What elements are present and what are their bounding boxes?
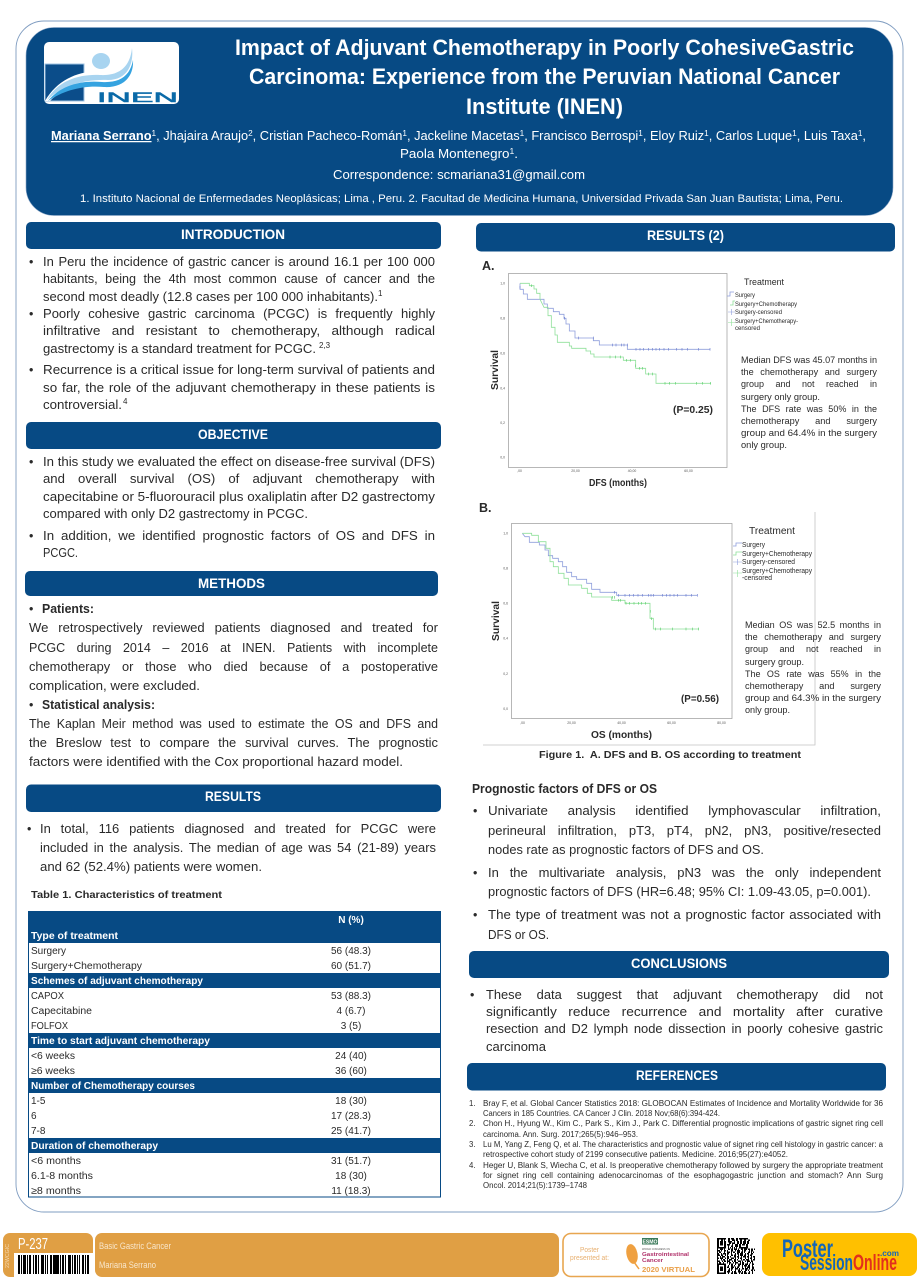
bullet: study aim: • bbox=[29, 455, 33, 469]
bullet: conclusion: carcinoma bbox=[486, 1040, 546, 1054]
session info bar: Mariana Serrano bbox=[99, 1260, 156, 1270]
note: DFS medians: chemotherapy and surgery bbox=[741, 416, 878, 426]
chart B: OS survival curves: 40,00 bbox=[617, 721, 626, 725]
table: characteristics of treatment: 56 (48.3) bbox=[331, 946, 371, 957]
table: characteristics of treatment: Time to start adjuvant chemotherapy bbox=[31, 1036, 210, 1047]
table: characteristics of treatment: Number of Chemotherapy courses bbox=[31, 1081, 195, 1092]
chart B: OS survival curves: 0,6 bbox=[503, 602, 508, 606]
table: characteristics of treatment: CAPOX bbox=[31, 991, 64, 1002]
note: DFS medians: only group. bbox=[741, 440, 787, 450]
affiliations: 1. Instituto Nacional de Enfermedades Neoplásicas; Lima , Peru. 2. Facultad de Medicina Humana, Universidad Privada San Juan Bautista; Lima, Peru. bbox=[80, 193, 843, 205]
bullet: multivariate analysis: In the multivariate analysis, pN3 was the only independent bbox=[488, 866, 882, 880]
bullet: univariate analysis: • bbox=[473, 804, 477, 818]
note: OS medians: group and 64.3% in the surgery bbox=[745, 693, 882, 703]
legend B bbox=[733, 526, 812, 582]
bullet: study aim: In this study we evaluated the effect on disease-free survival (DFS) bbox=[43, 455, 435, 469]
congress name: Gastrointestinal bbox=[642, 1252, 690, 1258]
legend A bbox=[727, 277, 798, 332]
heading: INTRODUCTION bbox=[26, 222, 441, 249]
table: characteristics of treatment: 60 (51.7) bbox=[331, 961, 371, 972]
chart A: DFS survival curves bbox=[490, 274, 727, 489]
chart B: OS survival curves: 0,8 bbox=[503, 566, 508, 570]
chart B: OS survival curves: (P=0.56) bbox=[681, 694, 719, 705]
panel: methods bbox=[25, 571, 438, 769]
authors: 1 bbox=[638, 129, 643, 138]
legend B: Surgery-censored bbox=[742, 559, 795, 566]
heading: OBJECTIVE: OBJECTIVE bbox=[198, 427, 268, 442]
bullet: recurrence: 4 bbox=[123, 397, 128, 406]
heading: METHODS bbox=[25, 571, 438, 596]
reference list: Bray F, et al. Global Cancer Statistics 2018: GLOBOCAN Estimates of Incidence and Mortality Worldwide for 36 bbox=[483, 1099, 883, 1108]
logo: INEN bbox=[44, 42, 179, 105]
chart A: DFS survival curves: 0,4 bbox=[500, 386, 505, 390]
reference list: carcinoma. Ann. Surg. 2017;265(5):946–953. bbox=[483, 1130, 638, 1139]
table: characteristics of treatment: FOLFOX bbox=[31, 1021, 68, 1032]
bullet: cohort summary: • bbox=[27, 822, 31, 836]
footer bbox=[3, 1233, 917, 1277]
icon: wheat bbox=[625, 1243, 639, 1269]
bullet: incidence: second most deadly (12.8 cases per 100 000 inhabitants). bbox=[43, 290, 378, 304]
heading: OBJECTIVE bbox=[26, 422, 441, 449]
bullet: PCGC: • bbox=[29, 307, 33, 321]
panel: results bbox=[26, 784, 441, 1197]
authors: , bbox=[862, 129, 866, 143]
authors: 1 bbox=[152, 129, 157, 138]
legend A: Surgery+Chemotherapy bbox=[735, 301, 798, 308]
subsection: statistical analysis: factors were identified with the Cox proportional hazard model. bbox=[29, 755, 403, 769]
label B: B. bbox=[479, 501, 492, 515]
panel: prognostic factors bbox=[472, 782, 882, 942]
table: characteristics of treatment: Surgery+Chemotherapy bbox=[31, 961, 142, 972]
table: characteristics of treatment: 25 (41.7) bbox=[331, 1126, 371, 1137]
table: characteristics of treatment: 6.1-8 months bbox=[31, 1171, 93, 1182]
bullet: incidence: • bbox=[29, 255, 33, 269]
note: OS medians: surgery group. bbox=[745, 657, 804, 667]
authors: Jhajaira Araujo bbox=[163, 129, 246, 143]
bullet: cohort summary bbox=[27, 822, 436, 874]
table: characteristics of treatment: 36 (60) bbox=[335, 1066, 367, 1077]
legend A: censored bbox=[735, 325, 760, 332]
authors: , Francisco Berrospi bbox=[524, 129, 638, 143]
logo: ESMO: ESMO bbox=[642, 1240, 658, 1246]
session info bar: Basic Gastric Cancer bbox=[99, 1241, 171, 1251]
authors: , Carlos Luque bbox=[709, 129, 792, 143]
table: characteristics of treatment bbox=[28, 911, 441, 1197]
reference list: 3. bbox=[469, 1140, 476, 1149]
subsection: patients: Patients: bbox=[42, 602, 94, 616]
table: characteristics of treatment: 31 (51.7) bbox=[331, 1156, 371, 1167]
reference list: retrospective cohort study of 2199 consecutive patients. Medicine. 2016;95(27):e4052. bbox=[483, 1150, 788, 1159]
bullet: type of treatment: The type of treatment was not a prognostic factor associated with bbox=[488, 908, 881, 922]
authors: , bbox=[156, 129, 160, 143]
title: Carcinoma: Experience from the Peruvian National Cancer bbox=[249, 64, 840, 89]
note: OS medians: chemotherapy and surgery bbox=[745, 681, 882, 691]
chart A: DFS survival curves: (P=0.25) bbox=[673, 405, 713, 416]
bullet: conclusion: resection and D2 lymph node dissection in poorly cohesive gastric bbox=[486, 1022, 883, 1036]
subsection: statistical analysis: the Breslow test to compare the survival curves. The prognostic bbox=[29, 736, 438, 750]
chart A: DFS survival curves: 60,00 bbox=[684, 469, 693, 473]
bullet: conclusion: These data suggest that adjuvant chemotherapy did not bbox=[486, 988, 884, 1002]
chart B: OS survival curves bbox=[483, 512, 815, 745]
reference list: Cancers in 185 Countries. CA Cancer J Clin. 2018 Nov;68(6):394-424. bbox=[483, 1109, 720, 1118]
authors: , Luis Taxa bbox=[797, 129, 858, 143]
authors: 1 bbox=[792, 129, 797, 138]
header banner bbox=[26, 28, 893, 216]
congress badge bbox=[563, 1234, 709, 1276]
legend A: Surgery bbox=[735, 292, 756, 299]
QR code bbox=[717, 1239, 755, 1273]
chart A: DFS survival curves: 0,0 bbox=[500, 456, 505, 460]
poster ID badge: 22WCGIC bbox=[5, 1244, 11, 1268]
note: DFS medians: surgery only group. bbox=[741, 392, 820, 402]
subsection: patients: • bbox=[29, 602, 33, 616]
legend A: Surgery+Chemotherapy- bbox=[735, 318, 798, 325]
chart A: DFS survival curves: 20,00 bbox=[571, 469, 580, 473]
subsection: patients: complication, were excluded. bbox=[29, 679, 200, 693]
bullet: univariate analysis: Univariate analysis identified lymphovascular infiltration, bbox=[488, 804, 881, 818]
bullet: PCGC: infiltrative and resistant to chemotherapy, although radical bbox=[43, 324, 435, 338]
panel: results 2 bbox=[476, 223, 895, 761]
reference list: Chon H., Hyung W., Kim C., Park S., Kim J., Park C. Differential prognostic implications of gastric signet ring cell bbox=[483, 1119, 883, 1128]
authors: 1 bbox=[402, 129, 408, 138]
chart B: OS survival curves: 1,0 bbox=[503, 532, 508, 536]
panel: introduction bbox=[26, 222, 441, 412]
bullet: PCGC bbox=[29, 307, 436, 356]
bullet: prognostic factors: • bbox=[29, 529, 33, 543]
bullet: PCGC: gastrectomy is a standard treatment for PCGC. bbox=[43, 342, 316, 356]
congress name: Cancer bbox=[642, 1258, 664, 1264]
reference list: 2. bbox=[469, 1119, 476, 1128]
chart B: OS survival curves: 60,00 bbox=[667, 721, 676, 725]
legend B: Surgery+Chemotherapy bbox=[742, 568, 812, 575]
poster ID badge: P-237 bbox=[18, 1236, 48, 1253]
bullet: PCGC: Poorly cohesive gastric carcinoma (PCGC) is frequently highly bbox=[43, 307, 436, 321]
chart A: DFS survival curves: DFS (months) bbox=[589, 478, 647, 489]
heading: RESULTS bbox=[26, 784, 441, 812]
subsection: patients: chemotherapy or those who died because of a postoperative bbox=[29, 660, 438, 674]
table: characteristics of treatment: Duration of chemotherapy bbox=[31, 1141, 158, 1152]
title: Institute (INEN) bbox=[466, 94, 623, 119]
authors: 1 bbox=[704, 129, 709, 138]
figure caption: Figure 1. A. DFS and B. OS according to treatment bbox=[539, 749, 802, 761]
reference list bbox=[469, 1099, 884, 1190]
poster ID badge bbox=[3, 1233, 93, 1277]
table: characteristics of treatment: ≥8 months bbox=[31, 1186, 81, 1197]
bullet: recurrence: so far, the role of the adjuvant chemotherapy in these patients is bbox=[43, 381, 435, 395]
note: OS medians: the chemotherapy and surgery bbox=[745, 632, 882, 642]
subsection: statistical analysis: The Kaplan Meir method was used to estimate the OS and DFS and bbox=[29, 717, 438, 731]
chart B: OS survival curves: 80,00 bbox=[717, 721, 726, 725]
authors: Paola Montenegro bbox=[400, 147, 502, 161]
note: OS medians bbox=[745, 620, 882, 715]
note: OS medians: only group. bbox=[745, 705, 790, 715]
bullet: prognostic factors bbox=[29, 529, 435, 560]
bullet: incidence bbox=[29, 255, 435, 304]
congress name: 2020 VIRTUAL bbox=[642, 1267, 696, 1274]
reference list: Oncol. 2014;21(5):1739–1748 bbox=[483, 1181, 587, 1190]
subsection: statistical analysis bbox=[29, 698, 438, 769]
subsection: statistical analysis: Statistical analysis: bbox=[42, 698, 155, 712]
table: characteristics of treatment: 11 (18.3) bbox=[331, 1186, 371, 1197]
chart B: OS survival curves: 20,00 bbox=[567, 721, 576, 725]
panel: conclusions bbox=[469, 951, 889, 1054]
bullet: univariate analysis: perineural infiltration, pT3, pT4, pN2, pN3, positive/resected bbox=[488, 824, 881, 838]
note: DFS medians: the chemotherapy and surgery bbox=[741, 367, 878, 377]
legend B: Surgery bbox=[742, 542, 765, 549]
title: Impact of Adjuvant Chemotherapy in Poorly CohesiveGastric bbox=[235, 35, 854, 60]
authors: , Jackeline Macetas bbox=[407, 129, 520, 143]
reference list: for signet ring cell containing adenocarcinomas of the esophagogastric junction and stomach? Ann Surg bbox=[483, 1171, 883, 1180]
heading: INTRODUCTION: INTRODUCTION bbox=[181, 227, 285, 242]
congress badge: presented at: bbox=[570, 1255, 609, 1262]
congress badge: Poster bbox=[580, 1247, 600, 1254]
subsection: statistical analysis: • bbox=[29, 698, 33, 712]
bullet: incidence: In Peru the incidence of gastric cancer is around 16.1 per 100 000 bbox=[43, 255, 435, 269]
heading: REFERENCES: REFERENCES bbox=[636, 1068, 718, 1083]
bullet: multivariate analysis: prognostic factors of DFS (HR=6.48; 95% CI: 1.09-43.05, p=0.001). bbox=[488, 885, 871, 899]
logo: PosterSessionOnline: Poster bbox=[782, 1235, 833, 1263]
chart A: DFS survival curves: 40,00 bbox=[628, 469, 636, 473]
table: characteristics of treatment: Surgery bbox=[31, 946, 66, 957]
subsection: patients bbox=[29, 602, 438, 693]
chart A: DFS survival curves: 0,2 bbox=[500, 421, 505, 425]
bullet: prognostic factors: In addition, we identified prognostic factors of OS and DFS in bbox=[43, 529, 435, 543]
table: characteristics of treatment: Schemes of adjuvant chemotherapy bbox=[31, 976, 203, 987]
table: characteristics of treatment: Type of treatment bbox=[31, 931, 119, 942]
subheading: prognostic factors: Prognostic factors of DFS or OS bbox=[472, 782, 657, 796]
legend B: Treatment bbox=[749, 526, 795, 537]
heading: METHODS: METHODS bbox=[198, 576, 265, 591]
table: characteristics of treatment: <6 weeks bbox=[31, 1051, 75, 1062]
heading: RESULTS: RESULTS bbox=[205, 789, 261, 804]
bullet: prognostic factors: PCGC. bbox=[43, 546, 78, 560]
chart A: DFS survival curves: ,00 bbox=[517, 469, 522, 473]
bullet: recurrence bbox=[29, 363, 435, 412]
subsection: patients: We retrospectively reviewed patients diagnosed and treated for bbox=[29, 621, 438, 635]
bullet: recurrence: controversial. bbox=[43, 398, 122, 412]
bullet: conclusion: significantly reduce recurrence and mortality after curative bbox=[486, 1005, 883, 1019]
table: characteristics of treatment: 4 (6.7) bbox=[337, 1006, 365, 1017]
reference list: 4. bbox=[469, 1161, 476, 1170]
bullet: cohort summary: included in the analysis. The median of age was 54 (21-89) years bbox=[40, 841, 436, 855]
table: characteristics of treatment: 6 bbox=[31, 1111, 37, 1122]
bullet: PCGC: 2,3 bbox=[319, 341, 331, 350]
reference list: Heger U, Blank S, Wiecha C, et al. Is preoperative chemotherapy followed by surgery the appropriate treatment bbox=[483, 1161, 884, 1170]
authors: 1 bbox=[520, 129, 525, 138]
panel: objective bbox=[26, 422, 441, 560]
authors: 1 bbox=[509, 147, 515, 156]
legend A: Surgery-censored bbox=[735, 309, 782, 316]
bullet: cohort summary: In total, 116 patients diagnosed and treated for PCGC were bbox=[40, 822, 436, 836]
authors bbox=[51, 129, 866, 161]
note: OS medians: The OS rate was 55% in the bbox=[745, 669, 881, 679]
table: characteristics of treatment: Capecitabine bbox=[31, 1006, 92, 1017]
bullet: univariate analysis: nodes rate as prognostic factors of DFS and OS. bbox=[488, 843, 764, 857]
table: characteristics of treatment: 17 (28.3) bbox=[331, 1111, 371, 1122]
table: characteristics of treatment: ≥6 weeks bbox=[31, 1066, 75, 1077]
table: characteristics of treatment: 24 (40) bbox=[335, 1051, 367, 1062]
chart B: OS survival curves: 0,2 bbox=[503, 672, 508, 676]
bullet: study aim: and overall survival (OS) of adjuvant chemotherapy with bbox=[43, 472, 435, 486]
table: characteristics of treatment: <6 months bbox=[31, 1156, 81, 1167]
bullet: incidence: habitants, being the 4th most common cause of cancer and the bbox=[43, 272, 435, 286]
bullet: recurrence: • bbox=[29, 363, 33, 377]
chart A: DFS survival curves: Survival bbox=[490, 350, 501, 390]
heading: CONCLUSIONS: CONCLUSIONS bbox=[631, 956, 727, 971]
logo: PosterSessionOnline: .com bbox=[880, 1249, 899, 1258]
bullet: study aim: compared with only D2 gastrectomy in PCGC. bbox=[43, 507, 308, 521]
bullet: type of treatment: DFS or OS. bbox=[488, 928, 549, 942]
authors: , Eloy Ruiz bbox=[643, 129, 704, 143]
logo: PosterSessionOnline: Online bbox=[853, 1250, 897, 1275]
authors: , Cristian Pacheco-Román bbox=[253, 129, 402, 143]
chart A: DFS survival curves: 0,6 bbox=[500, 352, 505, 356]
chart B: OS survival curves: ,00 bbox=[520, 721, 525, 725]
bullet: conclusion: • bbox=[470, 988, 474, 1002]
logo: PosterSessionOnline: Session bbox=[800, 1250, 853, 1275]
logo: INEN: INEN bbox=[97, 89, 178, 105]
table: characteristics of treatment: 53 (88.3) bbox=[331, 991, 371, 1002]
note: DFS medians: group and 64.4% in the surgery bbox=[741, 428, 878, 438]
label A: A. bbox=[482, 259, 494, 273]
bullet: cohort summary: and 62 (52.4%) patients were women. bbox=[40, 860, 262, 874]
table: characteristics of treatment: 18 (30) bbox=[335, 1171, 367, 1182]
authors: . bbox=[514, 147, 518, 161]
chart B: OS survival curves: Survival bbox=[491, 601, 502, 641]
bullet: study aim: capecitabine or 5-fluorouracil plus oxaliplatin after D2 gastrectomy bbox=[43, 490, 436, 504]
correspondence: Correspondence: scmariana31@gmail.com bbox=[333, 168, 585, 182]
logo: PosterSessionOnline bbox=[762, 1233, 917, 1276]
note: DFS medians bbox=[741, 355, 878, 450]
note: DFS medians: The DFS rate was 50% in the bbox=[741, 404, 877, 414]
table: characteristics of treatment: 7-8 bbox=[31, 1126, 46, 1137]
heading: RESULTS (2): RESULTS (2) bbox=[647, 228, 724, 243]
legend B: Surgery+Chemotherapy bbox=[742, 551, 812, 558]
table: characteristics of treatment: N (%) bbox=[338, 915, 364, 926]
heading: REFERENCES bbox=[467, 1063, 886, 1090]
table: characteristics of treatment: 18 (30) bbox=[335, 1096, 367, 1107]
chart B: OS survival curves: 0,0 bbox=[503, 707, 508, 711]
legend A: Treatment bbox=[744, 277, 784, 288]
authors: Mariana Serrano bbox=[51, 129, 152, 143]
bullet: type of treatment bbox=[473, 908, 881, 942]
session info bar bbox=[95, 1233, 559, 1277]
subsection: patients: PCGC during 2014 – 2016 at INEN. Patients with incomplete bbox=[29, 641, 438, 655]
bullet: type of treatment: • bbox=[473, 908, 477, 922]
chart B: OS survival curves: OS (months) bbox=[591, 730, 652, 741]
chart A: DFS survival curves: 0,8 bbox=[500, 316, 505, 320]
legend B: -censored bbox=[742, 575, 772, 582]
table: characteristics of treatment: 1-5 bbox=[31, 1096, 46, 1107]
reference list: Lu M, Yang Z, Feng Q, et al. The characteristics and prognostic value of signet ring cell histology in gastric cancer: a bbox=[483, 1140, 884, 1149]
reference list: 1. bbox=[469, 1099, 476, 1108]
bullet: study aim bbox=[29, 455, 436, 521]
chart A: DFS survival curves: 1,0 bbox=[500, 282, 505, 286]
barcode bbox=[18, 1255, 91, 1274]
authors: 1 bbox=[858, 129, 863, 138]
title bbox=[235, 35, 854, 119]
bullet: recurrence: Recurrence is a critical issue for long-term survival of patients and bbox=[43, 363, 435, 377]
heading: RESULTS (2) bbox=[476, 223, 895, 252]
bullet: multivariate analysis bbox=[473, 866, 882, 899]
chart B: OS survival curves: 0,4 bbox=[503, 636, 508, 640]
congress name: WORLD CONGRESS ON bbox=[642, 1247, 670, 1251]
bullet: multivariate analysis: • bbox=[473, 866, 477, 880]
table title: Table 1. Characteristics of treatment bbox=[31, 890, 223, 901]
congress name bbox=[642, 1247, 696, 1274]
panel: references bbox=[467, 1063, 886, 1190]
note: DFS medians: group and not reached in bbox=[741, 379, 877, 389]
note: OS medians: group and not reached in bbox=[745, 644, 881, 654]
bullet: conclusion bbox=[470, 988, 884, 1054]
authors: 2 bbox=[248, 129, 253, 138]
note: OS medians: Median OS was 52.5 months in bbox=[745, 620, 881, 630]
bullet: univariate analysis bbox=[473, 804, 881, 857]
heading: CONCLUSIONS bbox=[469, 951, 889, 978]
note: DFS medians: Median DFS was 45.07 months in bbox=[741, 355, 877, 365]
bullet: incidence: 1 bbox=[378, 289, 383, 298]
table: characteristics of treatment: 3 (5) bbox=[341, 1021, 361, 1032]
